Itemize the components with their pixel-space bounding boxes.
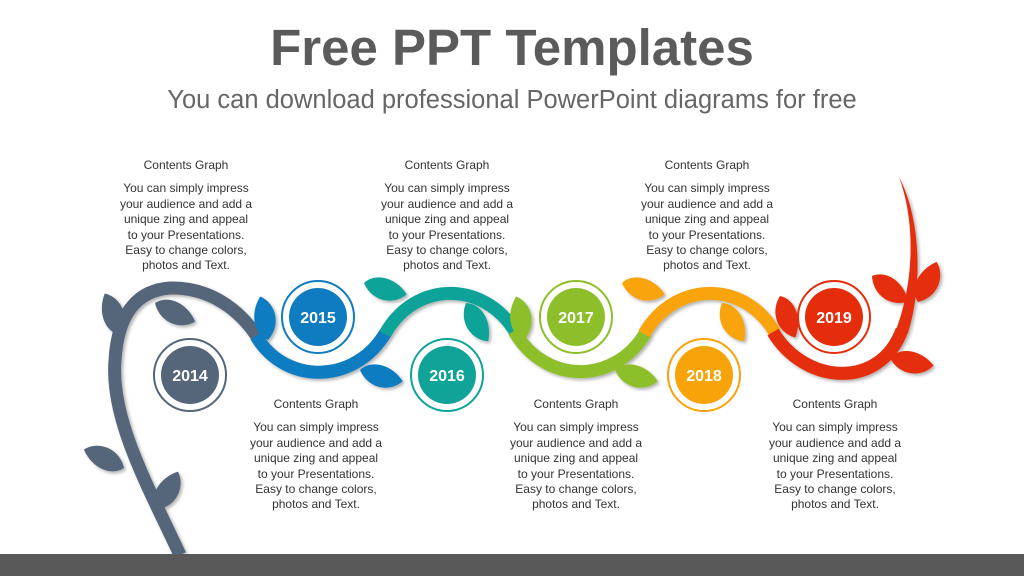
- text: 2016: [381, 158, 514, 272]
- text: 2019: Easy to change colors,: [774, 482, 896, 496]
- year circles: 2014: [172, 368, 208, 385]
- gray stem: [80, 288, 258, 555]
- text: 2015: [250, 397, 382, 511]
- text: 2018: You can simply impress: [644, 181, 770, 195]
- footer bar: [0, 554, 1024, 576]
- blue segment: [252, 295, 405, 394]
- text: 2019: your audience and add a: [769, 436, 901, 450]
- text: 2018: unique zing and appeal: [645, 212, 769, 226]
- text: 2019: You can simply impress: [772, 420, 898, 434]
- text: 2016: your audience and add a: [381, 197, 513, 211]
- green segment: [508, 295, 660, 394]
- text: 2016: to your Presentations.: [389, 228, 505, 242]
- text: 2014: your audience and add a: [120, 197, 252, 211]
- text: 2014: Easy to change colors,: [125, 243, 247, 257]
- text: 2016: You can simply impress: [384, 181, 510, 195]
- text: 2017: [510, 397, 642, 511]
- text: 2015: to your Presentations.: [258, 467, 374, 481]
- text: 2018: to your Presentations.: [649, 228, 765, 242]
- orange segment: [619, 272, 775, 347]
- year circles: 2015: [300, 310, 336, 327]
- teal segment: [361, 272, 516, 347]
- text: 2017: photos and Text.: [532, 497, 620, 511]
- text: 2015: You can simply impress: [253, 420, 379, 434]
- text: 2018: Easy to change colors,: [646, 243, 768, 257]
- text: 2016: unique zing and appeal: [385, 212, 509, 226]
- text: 2019: unique zing and appeal: [773, 451, 897, 465]
- text: 2019: to your Presentations.: [777, 467, 893, 481]
- text: 2017: You can simply impress: [513, 420, 639, 434]
- text: 2015: photos and Text.: [272, 497, 360, 511]
- text: 2014: to your Presentations.: [128, 228, 244, 242]
- text: 2016: Contents Graph: [405, 158, 489, 172]
- text: 2015: unique zing and appeal: [254, 451, 378, 465]
- text: 2017: Contents Graph: [534, 397, 618, 411]
- text: 2019: Contents Graph: [793, 397, 877, 411]
- text: 2017: Easy to change colors,: [515, 482, 637, 496]
- year circles: 2016: [429, 368, 465, 385]
- year circles: 2019: [816, 310, 852, 327]
- text: 2018: photos and Text.: [663, 258, 751, 272]
- text: 2017: unique zing and appeal: [514, 451, 638, 465]
- text: 2016: photos and Text.: [403, 258, 491, 272]
- red segment: [771, 177, 948, 379]
- text: 2016: Easy to change colors,: [386, 243, 508, 257]
- text: 2014: unique zing and appeal: [124, 212, 248, 226]
- text: 2018: [641, 158, 774, 272]
- text: 2014: [120, 158, 252, 272]
- text: 2017: your audience and add a: [510, 436, 642, 450]
- text: 2015: your audience and add a: [250, 436, 382, 450]
- text: 2019: [769, 397, 902, 511]
- text: 2018: your audience and add a: [641, 197, 773, 211]
- year circles: 2017: [558, 310, 594, 327]
- year circles: 2018: [686, 368, 722, 385]
- text: 2015: Easy to change colors,: [255, 482, 377, 496]
- text: 2018: Contents Graph: [665, 158, 749, 172]
- text: 2015: Contents Graph: [274, 397, 358, 411]
- year circles: [154, 281, 870, 411]
- subtitle: You can download professional PowerPoint diagrams for free: [167, 86, 857, 114]
- text: 2014: You can simply impress: [123, 181, 249, 195]
- text: 2014: Contents Graph: [144, 158, 228, 172]
- text: 2019: photos and Text.: [791, 497, 879, 511]
- text: 2014: photos and Text.: [142, 258, 230, 272]
- title: Free PPT Templates: [270, 19, 754, 76]
- text: 2017: to your Presentations.: [518, 467, 634, 481]
